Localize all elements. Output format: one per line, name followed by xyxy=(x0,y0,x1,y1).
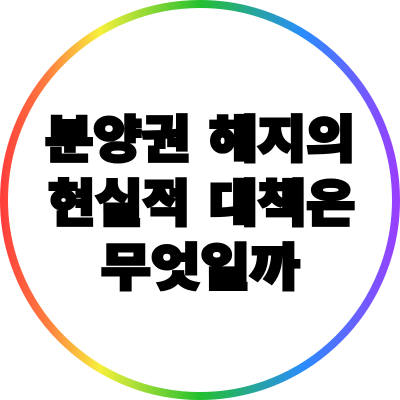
title line 2, second word: 대책은 xyxy=(209,176,355,232)
title xyxy=(45,112,355,296)
title line 2, first word: 현실적 xyxy=(48,176,190,232)
title line 3: 무엇일까 xyxy=(101,240,300,296)
title line 1, second word: 해지의 xyxy=(209,112,355,168)
title line 1, first word: 분양권 xyxy=(45,112,190,168)
